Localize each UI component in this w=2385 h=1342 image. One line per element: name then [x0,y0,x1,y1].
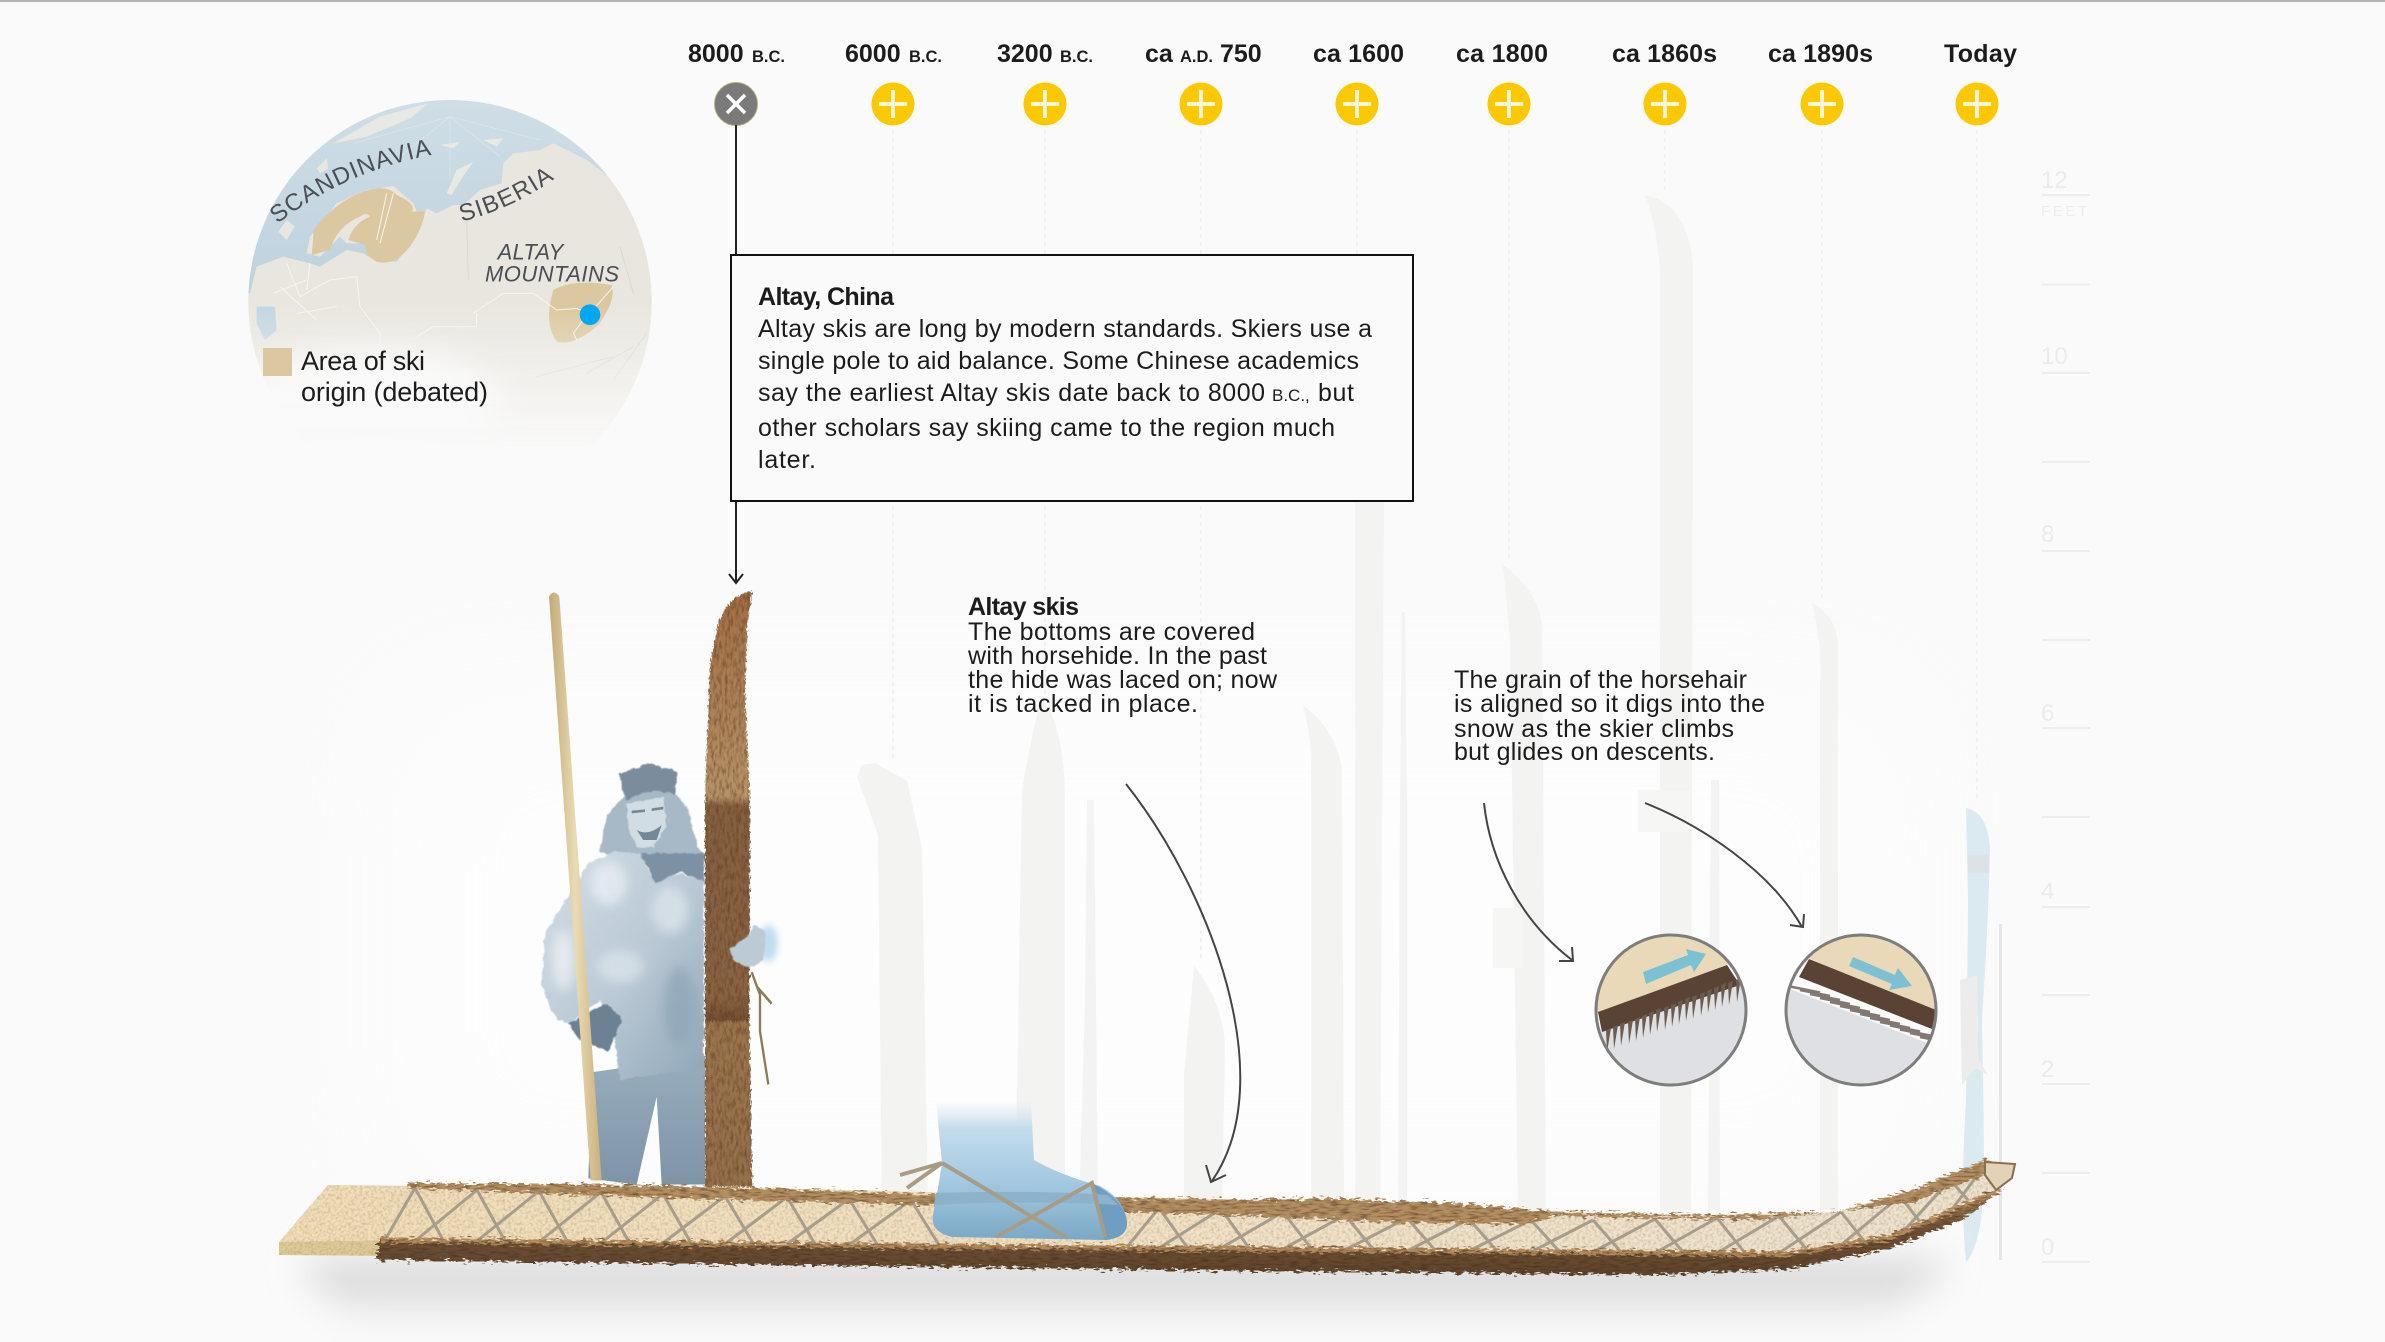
callout: Altay, China: later. [758,446,816,474]
timeline dates: ca 1890s [1768,40,1873,68]
label: Scandinavia: SCANDINAVIA [270,140,432,222]
height scale in feet: 6 [2041,700,2054,727]
annotation: Altay skis: it is tacked in place. [968,690,1198,718]
timeline dates: ca [1145,40,1174,68]
ski shadow [300,1262,1950,1325]
globe map [248,100,652,410]
upright ski [705,591,753,1187]
label: Altay Mountains: MOUNTAINS [485,262,619,287]
label: Altay Mountains: ALTAY [496,239,565,264]
height scale in feet: 12 [2041,167,2068,194]
callout: Altay, China: Altay skis are long by modern standards. Skiers use a [758,315,1372,343]
man: other glove [729,925,778,968]
callout: Altay, China: B.C., [1272,386,1310,405]
arrow: to ski bottom [1126,784,1240,1182]
annotation: Altay skis: with horsehide. In the past [967,642,1267,670]
label: Altay Mountains [485,239,619,287]
pole [549,592,602,1180]
dotted guide lines from timeline buttons [893,130,1977,960]
height scale in feet: 0 [2041,1234,2054,1261]
arrow: connector from selected date to ski tip [729,125,743,583]
map legend [263,346,488,407]
ski upper fur edge [409,1160,2000,1224]
man: face [627,797,667,847]
boot in binding [900,1100,1127,1240]
blue location dot [580,304,600,325]
timeline dates: ca 1860s [1612,40,1717,68]
man: glove on pole [568,1003,622,1052]
annotation: horsehair grain: snow as the skier climbs [1454,715,1734,743]
timeline buttons [714,82,1998,126]
annotation: Altay skis [967,593,1278,718]
figure: man in parka [542,764,704,1080]
boot lacing [900,1163,1105,1237]
height scale in feet: FEET [2041,203,2087,220]
man: parka shading [552,862,697,1047]
timeline dates: B.C. [1060,48,1093,66]
detail circle: hair gliding on descent [1784,934,1938,1086]
label: Siberia: SIBERIA [460,169,554,220]
faded historical skis behind the main ski [857,195,1838,1210]
timeline dates: ca 1800 [1456,40,1548,68]
annotation: Altay skis: the hide was laced on; now [968,666,1278,694]
main ski deck [377,1160,2005,1258]
top border line [0,0,2385,2]
arrow: to climbing grain detail [1484,803,1573,961]
map legend: origin (debated) [301,377,488,407]
map legend: Area of ski [301,346,425,376]
pale backdrop glow [400,700,1900,1200]
timeline dates: 6000 [845,40,901,68]
height scale in feet [2041,167,2090,1262]
annotation: horsehair grain: The grain of the horsehair [1454,666,1747,694]
annotation: Altay skis: The bottoms are covered [968,618,1255,646]
man: collar shadow [642,853,704,884]
arrow: to gliding grain detail [1645,803,1804,927]
today's ski in pale blue [1960,808,2002,1262]
callout: Altay, China: other scholars say skiing came to the region much [758,414,1335,442]
timeline dates: B.C. [909,48,942,66]
ski straps [752,972,772,1084]
ski lower fur edge [377,1187,2005,1275]
main ski, wood plank tail [279,1185,425,1256]
height scale in feet: 8 [2041,521,2054,548]
timeline dates: 3200 [997,40,1053,68]
height scale in feet: 4 [2041,878,2054,905]
callout: Altay, China: say the earliest Altay skis date back to 8000 [758,379,1265,407]
callout: Altay, China: but [1318,379,1354,407]
height scale in feet: 2 [2041,1056,2054,1083]
timeline dates: 750 [1220,40,1262,68]
callout: Altay, China: single pole to aid balance. Some Chinese academics [758,347,1359,375]
timeline dates: A.D. [1180,48,1213,66]
man's legs [588,1056,705,1185]
timeline dates: ca 1600 [1313,40,1404,68]
timeline dates: 8000 [688,40,744,68]
timeline dates: B.C. [752,48,785,66]
detail circle: hair digging in on climb [1594,934,1748,1086]
ski tip [1985,1162,2015,1190]
callout: Altay, China: Altay, China [758,283,895,311]
timeline dates: Today [1944,40,2017,68]
annotation: horsehair grain: but glides on descents. [1454,738,1715,766]
man: fur hat [619,764,677,801]
annotation: horsehair grain [1454,666,1765,766]
ski lacing [385,1165,1995,1253]
man: hood [599,764,704,867]
timeline dates [688,40,2017,68]
annotation: Altay skis: Altay skis [968,593,1079,621]
callout: Altay, China [731,255,1413,501]
annotation: horsehair grain: is aligned so it digs into the [1454,690,1765,718]
man: parka [542,852,704,1080]
height scale in feet: 10 [2041,343,2068,370]
man: facial features [632,807,663,840]
